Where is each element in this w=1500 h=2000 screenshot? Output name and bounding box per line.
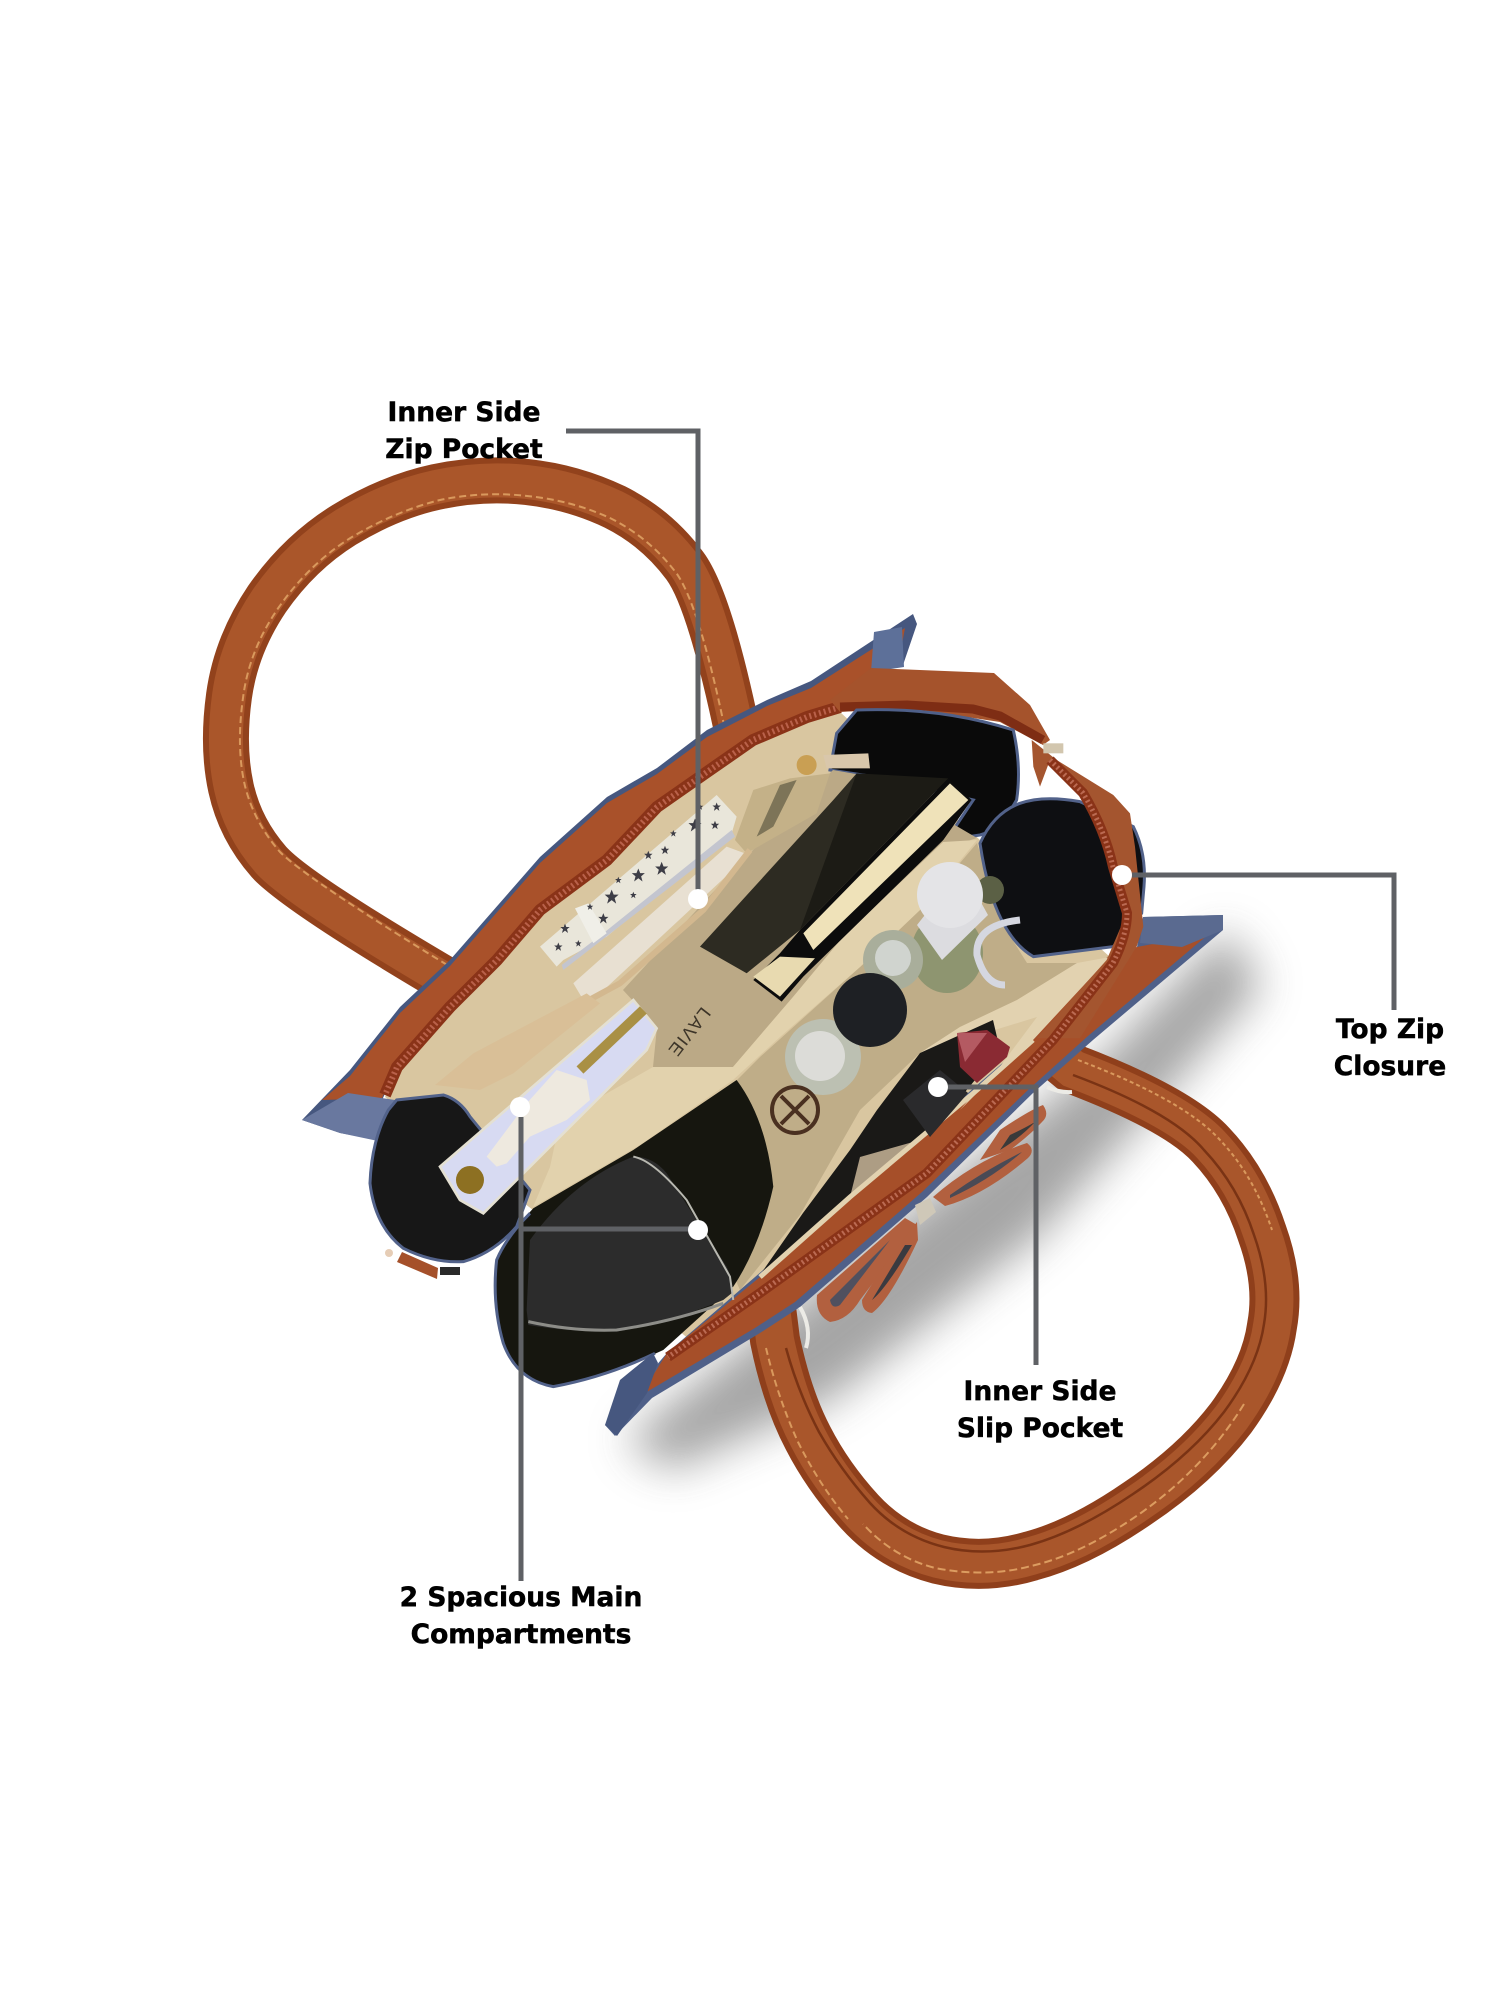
handle: bottom leather strap xyxy=(766,1050,1274,1573)
khaki lower compartment floor xyxy=(700,843,1077,1290)
brand text: LAVIE xyxy=(664,1004,715,1061)
bow detail xyxy=(817,1105,1046,1322)
upper pocket items xyxy=(540,753,972,1027)
star notepad xyxy=(540,795,737,970)
handle: top leather strap xyxy=(226,480,745,1000)
leader line xyxy=(521,1117,690,1581)
callout: inner side slip pocket xyxy=(928,1077,1123,1444)
compartment: left black pocket xyxy=(370,1095,530,1262)
callout: 2 spacious main compartments xyxy=(400,1097,708,1650)
label text: Compartments xyxy=(411,1619,631,1650)
notebook pages xyxy=(803,783,968,950)
notebook black cover xyxy=(753,778,972,1002)
compartment: lower black pocket xyxy=(495,1080,773,1387)
marker dot top xyxy=(510,1097,530,1117)
leader line xyxy=(948,1087,1036,1365)
dark slip pocket area xyxy=(760,1020,1033,1277)
label text: Top Zip xyxy=(1336,1014,1444,1045)
black compact xyxy=(903,1070,968,1137)
navy corner at lower panel xyxy=(605,1353,658,1436)
dark wedge beside book xyxy=(800,773,948,930)
logo medallion xyxy=(772,1087,818,1133)
gold zip pull and tag xyxy=(797,753,870,775)
lipstick xyxy=(957,1030,1010,1083)
handbag body xyxy=(302,614,1223,1436)
marker dot xyxy=(688,889,708,909)
label text: 2 Spacious Main xyxy=(400,1582,642,1613)
dark folded flap xyxy=(527,1157,732,1332)
bottle with white cap xyxy=(911,862,1004,993)
callout: top zip closure xyxy=(1112,865,1446,1082)
marker dot xyxy=(1112,865,1132,885)
label text: Closure xyxy=(1334,1051,1446,1082)
upper panel: navy edge, tan strip and zipper xyxy=(302,614,1050,1141)
tan zip pouch xyxy=(735,773,830,853)
callout: inner side zip pocket xyxy=(385,397,708,909)
lower panel: navy edge and tan strip xyxy=(605,915,1223,1436)
stitched tan strap xyxy=(540,850,750,1027)
label text: Zip Pocket xyxy=(385,434,543,465)
marker dot xyxy=(928,1077,948,1097)
compartment: top right black pocket xyxy=(830,710,1018,840)
marker dot right xyxy=(688,1220,708,1240)
label text: Inner Side xyxy=(388,397,540,428)
compartment: right black pocket xyxy=(980,799,1144,957)
metal rings and strap tab xyxy=(385,1087,1072,1348)
zipper tape and main zipper xyxy=(668,740,1143,1357)
strap loop xyxy=(977,920,1020,985)
white phone card xyxy=(573,847,745,1000)
label text: Inner Side xyxy=(964,1376,1116,1407)
leader line xyxy=(566,431,698,890)
glass bottle with black cap xyxy=(785,930,923,1095)
book pocket slab xyxy=(700,773,893,973)
cream partition band xyxy=(533,840,977,1207)
khaki partition xyxy=(623,770,977,1067)
label text: Slip Pocket xyxy=(957,1413,1123,1444)
cream strip by lower zipper xyxy=(920,957,1110,1110)
tan flap and zip pouch with white oval xyxy=(435,993,657,1213)
bag drop shadow xyxy=(625,930,1262,1470)
leader line xyxy=(1132,875,1394,1010)
interior floor xyxy=(385,712,1110,1340)
